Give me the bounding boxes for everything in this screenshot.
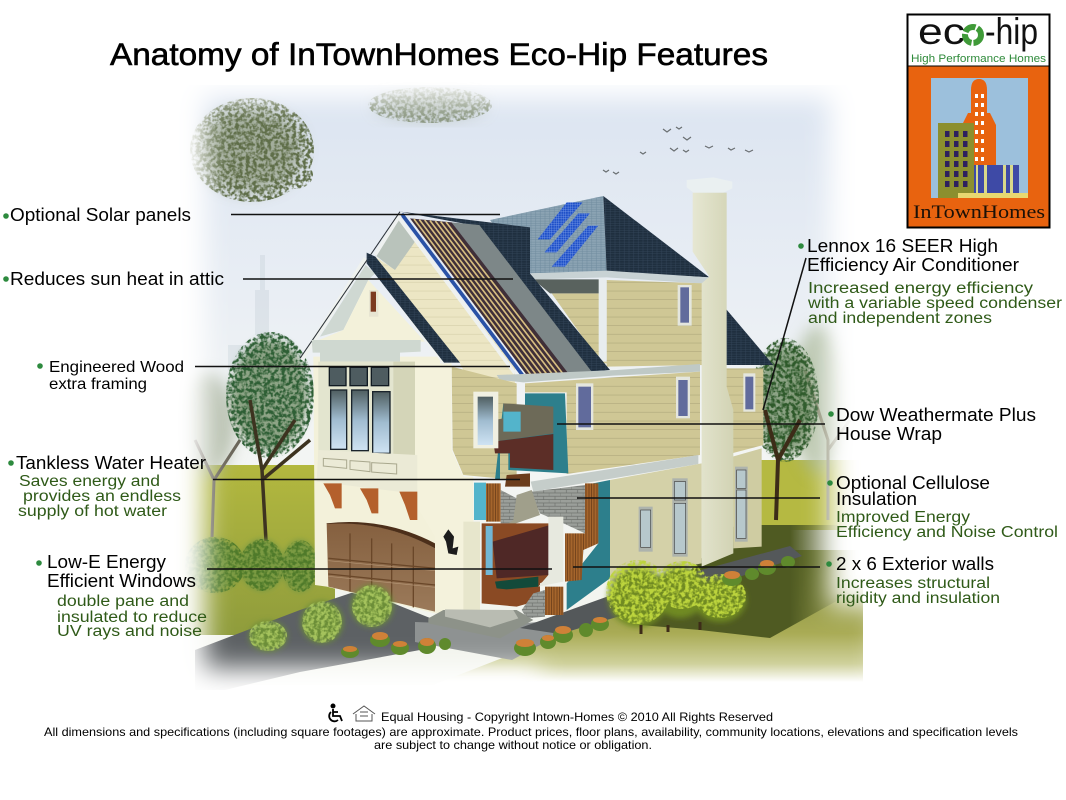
distant tower haze [228,255,269,370]
mid floor siding [525,372,700,474]
lower right stucco wall [610,463,702,582]
chimney shaft [693,193,733,567]
flower border green [341,556,795,658]
windows on siding [576,285,755,430]
callout: house wrap: House Wrap [836,423,942,444]
stucco main wall [313,357,473,613]
callout: water heater: Tankless Water Heater [16,452,206,473]
eave trim [497,364,700,382]
soffit [533,279,600,293]
small trees left [249,585,393,651]
hip roof dark face [603,196,709,277]
windows on stucco [639,467,748,557]
flower border orange [343,560,774,652]
blue gable rake [402,214,523,375]
garage door [327,522,435,612]
leader lines [195,214,825,569]
front small gable wall [315,280,425,342]
logo olive building [938,123,974,198]
callout: air conditioner: and independent zones [808,310,992,327]
gable edge line [300,212,400,358]
stucco front lower [463,522,480,610]
house illustration [300,177,773,638]
gable soffit small [320,265,375,337]
tree left pale [190,368,242,537]
lower cutaway teal [567,480,610,610]
trim post [599,278,607,362]
footer disclaimer: are subject to change without notice or obligation. [374,738,652,752]
callout: house wrap: Dow Weathermate Plus [836,404,1036,425]
callout: air conditioner: Increased energy efficiency [808,280,1033,297]
exposed rafters [410,218,568,375]
right side wing lower wall [733,448,762,548]
callout: engineered wood [37,359,184,393]
callout: insulation [827,472,1058,541]
sofa [495,577,538,589]
wall lantern [443,529,458,555]
front gable roof [367,253,460,363]
logo name: InTownHomes [913,202,1045,223]
upper floor siding [552,280,705,367]
callout: water heater: Saves energy and [19,473,160,490]
plaster grey [502,490,540,528]
attic vent [369,290,378,317]
icon: wheelchair accessibility [329,704,342,721]
callout: air conditioner: Efficiency Air Conditioner [807,254,1019,275]
callout: insulation: Insulation [836,488,917,509]
callout: exterior walls: 2 x 6 Exterior walls [836,553,994,574]
callout: windows: Low-E Energy [47,551,167,572]
lower cut window [486,526,493,575]
background scene: sky, trees and lawn [160,85,863,690]
lower blue insulation [474,483,486,520]
callout: windows: UV rays and noise [57,623,202,640]
logo olive windows [945,131,968,187]
stucco front right column [415,363,473,610]
footer disclaimer: All dimensions and specifications (including square footages) are approximate. Product prices, floor plans, availability, community locations, elevations and specification levels [44,725,1018,739]
wood studs right [565,483,598,582]
footer copyright: Equal Housing - Copyright Intown-Homes © 2010 All Rights Reserved [381,710,773,724]
hip roof eave [531,271,709,284]
recycle icon [965,27,981,43]
lower wood stud bottom [545,587,563,615]
white gable trim [375,215,515,373]
callout: insulation: Efficiency and Noise Control [836,524,1058,541]
callout: windows [36,551,207,640]
logo wordmark [918,11,1038,52]
logo wordmark: ec [918,11,965,52]
cut wall grey [486,403,553,442]
right side wing upper wall [721,368,763,453]
hip roof light face [490,196,607,273]
brick cutaway [501,485,585,533]
tree top left [190,98,314,202]
window glass upper [578,287,753,427]
lower right window frame [538,517,563,587]
right side roof wing [721,305,773,365]
lower cut brown floor [505,473,530,487]
callout: insulation: Optional Cellulose [836,472,990,493]
logo blue building [974,165,1019,193]
callout: air conditioner [798,235,1062,327]
brackets [323,483,417,520]
foreground shrubs and flowers [249,556,795,658]
callout: windows: Efficient Windows [47,570,196,591]
logo [908,11,1050,228]
logo wordmark: -hip [985,11,1038,52]
gable inner soffit [375,218,415,272]
callout: air conditioner: with a variable speed condenser [807,295,1062,312]
lawn foreground [462,550,863,685]
callout: exterior walls: rigidity and insulation [836,590,1000,607]
callout: water heater: provides an endless [23,488,181,505]
solar panels [538,202,598,267]
callout: exterior walls: Increases structural [836,575,990,592]
tree right pale [792,325,850,520]
second-floor teal cutaway [495,393,568,480]
steps [428,610,533,638]
bay window block [318,362,415,455]
cut room maroon [493,434,553,470]
bay base trim [323,458,397,474]
yellow rafter stripes [414,219,563,374]
callout: exterior walls [826,553,1000,607]
driveway [195,592,430,688]
lawn shadow [640,525,840,638]
lower brick bottom [522,590,545,618]
lower wood studs [486,483,501,522]
footer disclaimer [44,725,1018,752]
front gable white trim [302,258,445,363]
roof grey fascia [452,222,592,373]
large bushes right [606,560,746,634]
bay base panels [317,450,417,492]
logo sky panel [931,78,1028,198]
concrete walk [415,622,554,660]
left siding beside bay [452,367,517,480]
lower panes [331,390,390,453]
callout: solar panels: Optional Solar panels [10,204,191,225]
upper panes [329,367,389,386]
front gable big wall [375,242,515,390]
steps top tread [445,609,518,627]
callout: air conditioner: Lennox 16 SEER High [807,235,998,256]
window glass lower [641,470,746,553]
lawn right [762,460,850,530]
logo orange tower [962,79,996,190]
bay cornice [312,340,421,362]
title: Anatomy of InTownHomes Eco-Hip Features [110,36,768,72]
icon: equal housing [353,706,375,721]
callout: water heater: supply of hot water [18,503,167,520]
lower room maroon [493,525,550,578]
lawn left [184,465,335,635]
chimney top [687,177,732,193]
logo tower windows [975,94,984,161]
roof dark valley [400,212,610,372]
tree right dark [751,338,819,520]
tree left dark [226,332,314,541]
callout: water heater [8,452,206,520]
callout: engineered wood: Engineered Wood [49,359,184,376]
logo header [908,15,1049,66]
callout: engineered wood: extra framing [49,376,147,393]
logo ground strip [958,193,1028,198]
bushes left [185,537,318,593]
side walk along wall [520,546,802,634]
logo blue building stripes [976,165,1013,193]
birds [603,127,753,174]
callout: insulation: Improved Energy [836,509,970,526]
floor band [531,455,698,492]
cut blue insulation [503,412,521,432]
callout: windows: double pane and [57,593,189,610]
tree top center [368,87,492,123]
upper cut window [473,392,498,448]
callout: windows: insulated to reduce [57,609,207,626]
logo tagline: High Performance Homes [911,53,1047,65]
lower cut room [482,523,550,607]
callout: house wrap [828,404,1036,444]
callout: sun heat: Reduces sun heat in attic [10,268,224,289]
